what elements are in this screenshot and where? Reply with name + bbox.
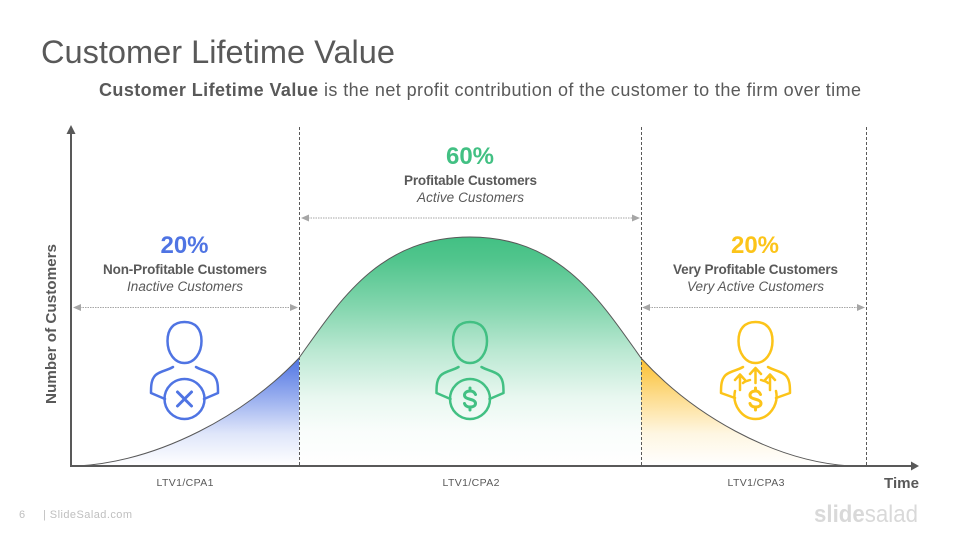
- text block: very profitable: Very Profitable Customers: [673, 262, 838, 277]
- text block: very profitable: 20%: [731, 232, 779, 259]
- label: LTV1/CPA3: LTV1/CPA3: [728, 477, 785, 489]
- text block: non-profitable: Non-Profitable Customers: [103, 262, 267, 277]
- span arrow: right: [642, 304, 865, 311]
- title: Customer Lifetime Value: [41, 34, 395, 70]
- logo wordmark: slidesalad: [814, 501, 918, 528]
- dashed dividers: [300, 127, 866, 466]
- text block: profitable: Profitable Customers: [404, 173, 537, 188]
- icon: person with rising dollar: [721, 322, 790, 419]
- text block: profitable: [404, 143, 537, 205]
- span arrow: center: [301, 214, 640, 222]
- label: LTV1/CPA2: LTV1/CPA2: [442, 477, 500, 489]
- y axis arrow: [66, 125, 76, 467]
- text block: profitable: 60%: [446, 143, 494, 170]
- bell curve: [78, 237, 850, 466]
- text block: profitable: Active Customers: [416, 190, 524, 205]
- area: green segment: [299, 237, 641, 466]
- icon: person with cross: [151, 322, 218, 419]
- text block: non-profitable: Inactive Customers: [127, 279, 243, 294]
- x axis label: Time: [884, 475, 919, 492]
- y axis label: Number of Customers: [44, 244, 60, 404]
- text block: very profitable: [673, 232, 838, 294]
- span arrow: left: [73, 304, 298, 311]
- icon: person with dollar: [436, 322, 504, 419]
- subtitle: Customer Lifetime Value is the net profit contribution of the customer to the firm over time: [99, 80, 861, 100]
- x axis arrow: [70, 462, 919, 470]
- footer source: | SlideSalad.com: [43, 509, 132, 521]
- area: blue segment: [78, 358, 299, 466]
- page number: 6: [19, 509, 25, 521]
- text block: non-profitable: [103, 232, 267, 294]
- text block: non-profitable: 20%: [160, 232, 209, 259]
- text block: very profitable: Very Active Customers: [687, 279, 824, 294]
- area: yellow segment: [641, 358, 850, 466]
- label: LTV1/CPA1: LTV1/CPA1: [156, 477, 214, 489]
